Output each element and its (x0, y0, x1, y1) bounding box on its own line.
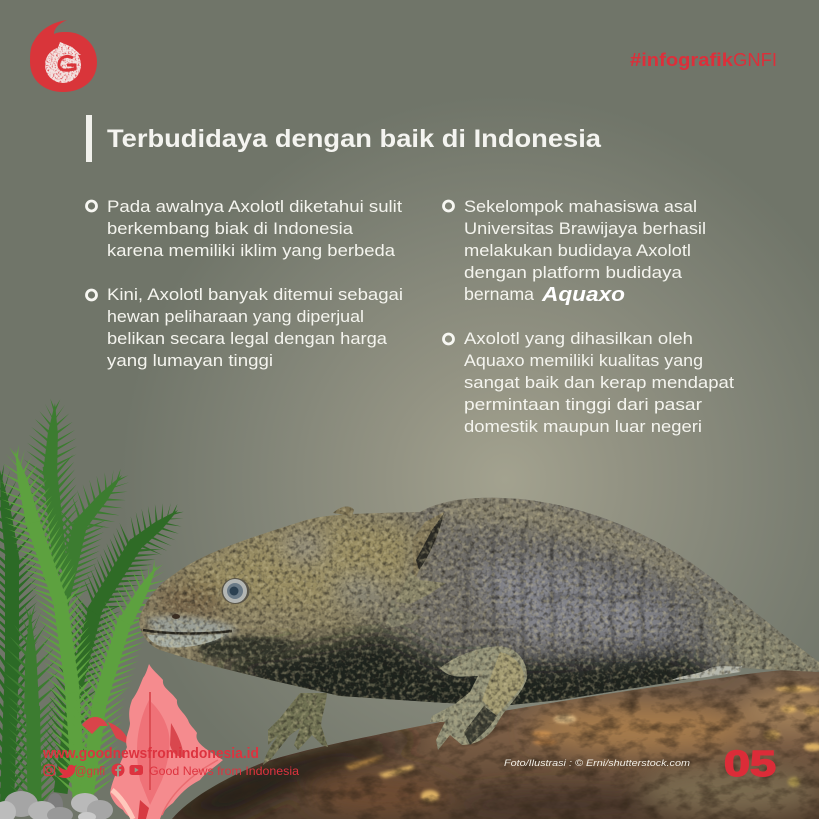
bullet: kualitas: Aquaxo memiliki kualitas yang (464, 351, 703, 370)
axolotl body (139, 498, 819, 706)
bullet: Aquaxo: dengan platform budidaya (464, 263, 683, 282)
axolotl wrinkles (444, 524, 766, 668)
bullet: peliharaan: belikan secara legal dengan harga (107, 329, 388, 348)
icon: instagram (44, 765, 54, 776)
bullet: kualitas: permintaan tinggi dari pasar (464, 395, 702, 414)
bullet: peliharaan (86, 285, 403, 370)
icon: twitter (58, 765, 77, 778)
illustration: rock (160, 668, 819, 819)
photo credit: Foto/Ilustrasi : © Erni/shutterstock.com (504, 758, 690, 769)
illustration: green water plants (0, 397, 196, 814)
bullet: Aquaxo: bernama (464, 284, 534, 304)
axolotl shading (142, 498, 814, 705)
bullet: peliharaan: Kini, Axolotl banyak ditemui sebagai (107, 285, 403, 304)
hashtag: GNFI: GNFI (733, 49, 777, 70)
title: Terbudidaya dengan baik di Indonesia (107, 125, 602, 153)
illustration: pebbles (0, 791, 113, 819)
channel name: Good News from Indonesia (149, 764, 299, 778)
page number: 05 (724, 743, 776, 784)
bullet: Aquaxo: melakukan budidaya Axolotl (464, 241, 691, 260)
hashtag: infografik: #infografik (630, 49, 734, 70)
bullet: Aquaxo: Aquaxo (541, 284, 625, 306)
axolotl rear foot (672, 666, 742, 680)
title accent bar (86, 115, 92, 162)
bullet: iklim: berkembang biak di Indonesia (107, 219, 354, 238)
axolotl back leg (263, 693, 328, 765)
bullet: iklim: Pada awalnya Axolotl diketahui sulit (107, 197, 402, 216)
bullet: kualitas: sangat baik dan kerap mendapat (464, 373, 734, 392)
axolotl dorsal bump (333, 506, 354, 516)
icon: youtube (130, 765, 143, 775)
bullet: iklim (86, 197, 402, 260)
handle: @gnfi (75, 766, 105, 778)
bullet: kualitas: Axolotl yang dihasilkan oleh (464, 329, 693, 348)
axolotl eye (222, 578, 250, 604)
icon: facebook (112, 764, 124, 776)
logo: GNFI red swirl (30, 20, 97, 92)
illustration: red plant behind seaweed (82, 717, 130, 745)
website url: www.goodnewsfromindonesia.id (42, 746, 259, 762)
bullet: kualitas (444, 329, 734, 436)
axolotl front leg (430, 646, 527, 750)
illustration: axolotl (139, 498, 819, 765)
bullet: peliharaan: yang lumayan tinggi (107, 351, 273, 370)
axolotl gills (385, 512, 446, 628)
bullet: kualitas: domestik maupun luar negeri (464, 417, 702, 436)
axolotl nostril (172, 614, 180, 619)
bullet: peliharaan: hewan peliharaan yang diperjual (107, 307, 364, 326)
bullet: iklim: karena memiliki iklim yang berbeda (107, 241, 396, 260)
illustration: pink seaweed (110, 664, 223, 819)
bullet: Aquaxo: Sekelompok mahasiswa asal (464, 197, 697, 216)
bullet: Aquaxo: Universitas Brawijaya berhasil (464, 219, 706, 238)
social row (44, 764, 299, 778)
bullet: Aquaxo (444, 197, 706, 306)
